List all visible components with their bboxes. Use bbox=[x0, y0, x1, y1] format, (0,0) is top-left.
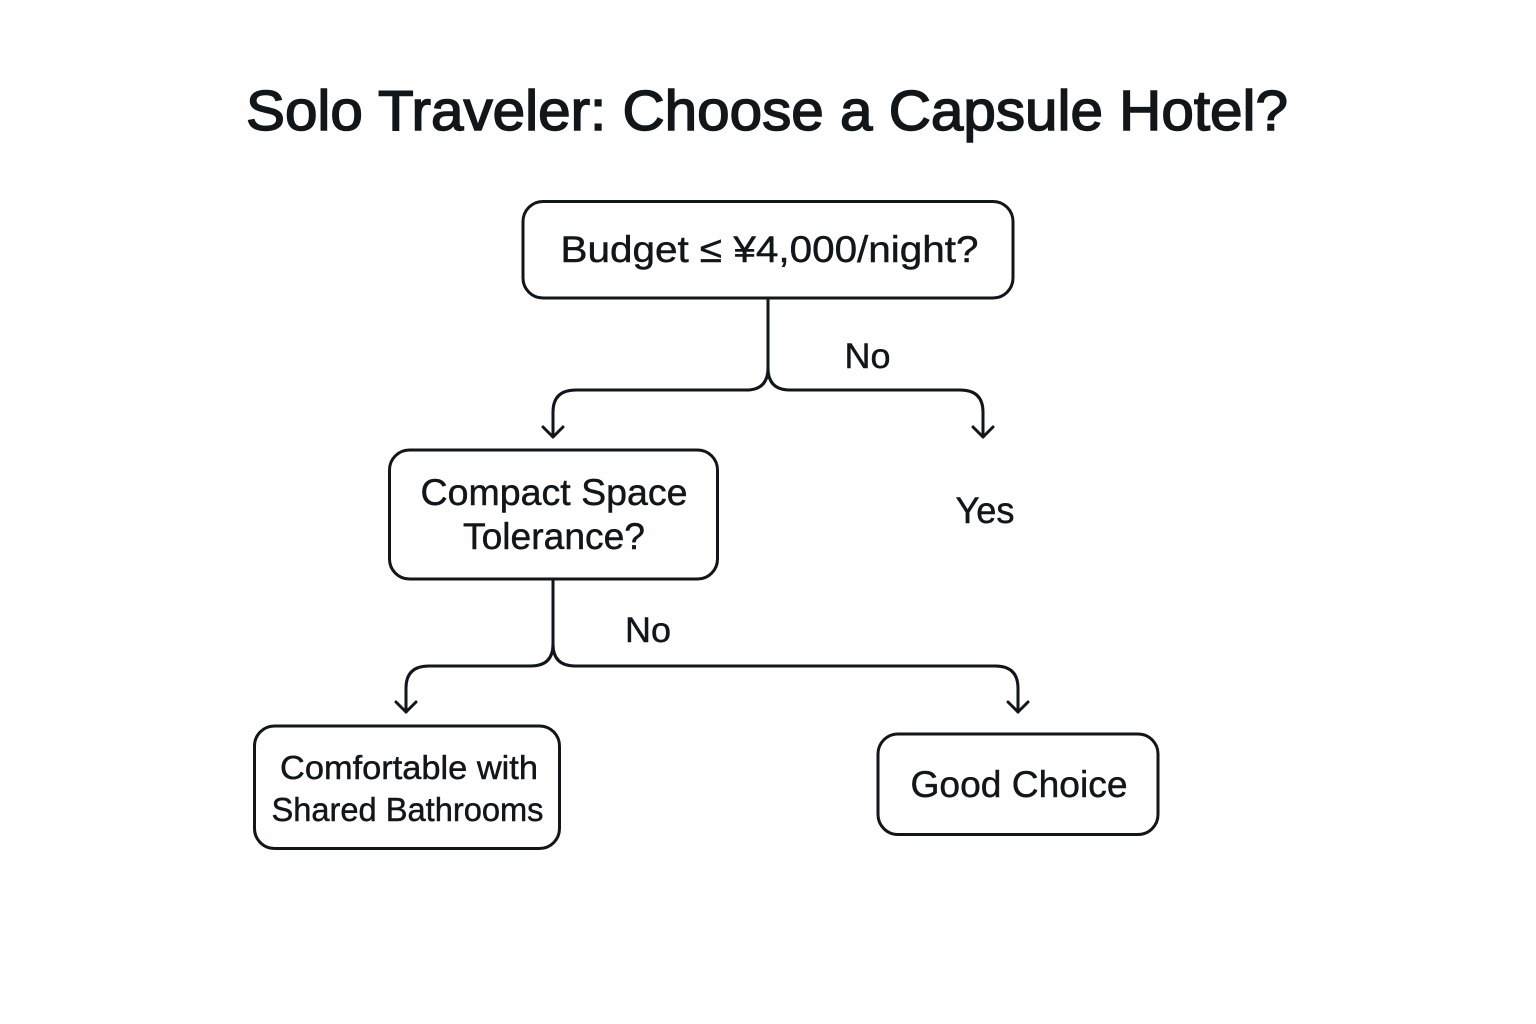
outcome box: shared bathrooms: Comfortable with bbox=[280, 749, 538, 786]
arrows: budget branches bbox=[543, 298, 993, 437]
arrows: tolerance branches bbox=[396, 579, 1028, 712]
outcome box: shared bathrooms bbox=[254, 726, 560, 848]
decision box: compact space tolerance: Compact Space bbox=[420, 472, 688, 513]
outcome box: good choice: Good Choice bbox=[910, 764, 1128, 805]
decision box: budget bbox=[523, 202, 1013, 298]
title: Solo Traveler: Choose a Capsule Hotel? bbox=[246, 79, 1288, 143]
decision box: budget: Budget ≤ ¥4,000/night? bbox=[560, 229, 978, 270]
label: No (tolerance): No bbox=[625, 611, 671, 650]
outcome box: good choice bbox=[878, 734, 1158, 834]
decision box: compact space tolerance bbox=[390, 450, 718, 579]
label: Yes (budget): Yes bbox=[956, 490, 1014, 531]
decision box: compact space tolerance: Tolerance? bbox=[463, 516, 645, 557]
outcome box: shared bathrooms: Shared Bathrooms bbox=[272, 791, 544, 828]
label: No (budget): No bbox=[844, 337, 890, 376]
